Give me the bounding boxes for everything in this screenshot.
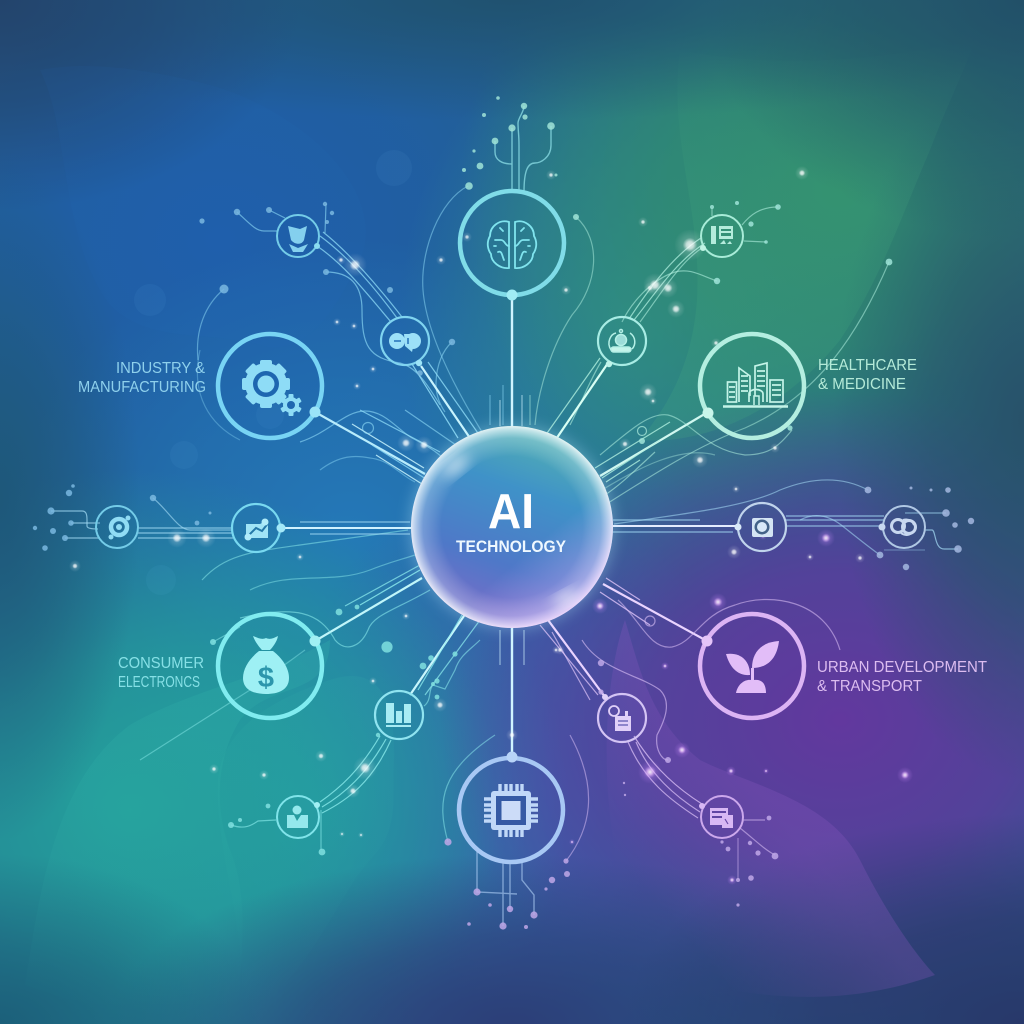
central orb xyxy=(409,424,615,630)
node end dots: grey-blue right xyxy=(865,486,974,570)
node: far-right small xyxy=(878,506,925,548)
node: brain xyxy=(460,191,564,300)
node: lower-right form xyxy=(598,694,646,742)
icon: person pin card xyxy=(287,806,308,828)
node end dots: green side xyxy=(462,96,892,444)
icon: form xyxy=(609,706,631,731)
label: urban xyxy=(817,659,988,695)
node end dots: teal side xyxy=(210,605,458,855)
icon: orbit ring xyxy=(108,516,130,540)
node: top-left small xyxy=(277,215,320,257)
icon: trend card xyxy=(244,518,269,540)
icon: sprout xyxy=(726,641,779,693)
icon: documents xyxy=(710,808,733,828)
node: right small xyxy=(734,503,786,551)
top tree connectors xyxy=(495,106,551,192)
icon: bar chart xyxy=(386,703,411,727)
background wave: inner teal fold xyxy=(218,676,394,1010)
node: money xyxy=(218,614,322,718)
node: far-left small xyxy=(96,506,138,548)
bottom tree connectors xyxy=(477,852,534,926)
label: industry xyxy=(78,360,206,396)
icon: microchip xyxy=(484,784,538,837)
label: industry: MANUFACTURING xyxy=(78,379,206,396)
node: upper-left small xyxy=(381,317,429,366)
node: lower-left outer xyxy=(277,796,320,838)
horizontal connector lines xyxy=(51,480,958,555)
node end dots: blue side xyxy=(33,202,455,551)
icon: cloud brain xyxy=(892,519,916,535)
radial connector lines: lower-left xyxy=(140,530,495,850)
AI heading: AI xyxy=(488,485,534,539)
node end dots: violet side xyxy=(444,660,778,930)
node: chip xyxy=(459,752,563,862)
icon: ring badge xyxy=(752,518,773,537)
node: lower-right outer xyxy=(699,796,743,838)
background wave: top-right green xyxy=(640,40,975,441)
label: healthcare: & MEDICINE xyxy=(818,376,906,393)
background wave: bottom-left teal xyxy=(25,640,330,1011)
icon: brain xyxy=(488,221,536,268)
label: consumer: CONSUMER xyxy=(118,655,204,672)
radial connector lines: upper-right xyxy=(530,207,889,505)
centre spokes top and bottom xyxy=(500,296,524,757)
node: lower-left chart xyxy=(375,691,423,739)
node: city xyxy=(700,334,804,438)
node: gear xyxy=(218,334,322,438)
label: industry: INDUSTRY & xyxy=(116,360,206,377)
background wave: top-left blue xyxy=(40,66,366,347)
icon: money bag: $ xyxy=(258,662,274,694)
icon: talking heads xyxy=(389,333,421,352)
node: plant xyxy=(700,614,804,718)
label: urban: URBAN DEVELOPMENT xyxy=(817,659,988,676)
sparkles xyxy=(69,166,913,885)
background blob dots xyxy=(134,150,412,595)
icon: gears xyxy=(242,360,302,416)
node: upper-right small xyxy=(598,317,646,367)
icon: city skyline xyxy=(723,363,788,406)
label: healthcare xyxy=(818,357,917,393)
node: top-right small xyxy=(700,215,743,257)
radial connector lines: lower-right xyxy=(540,578,840,880)
icon: gauge figure xyxy=(609,330,635,352)
icon: document board xyxy=(711,226,733,244)
background wave: bottom-right purple xyxy=(607,620,935,997)
icon: mask figure xyxy=(288,226,308,252)
node: chart small xyxy=(232,504,286,552)
label: healthcare: HEALTHCARE xyxy=(818,357,917,374)
label: consumer: ELECTRONCS xyxy=(118,674,200,691)
label: urban: & TRANSPORT xyxy=(817,678,922,695)
label: consumer xyxy=(118,655,204,691)
radial connector lines: upper-left xyxy=(197,186,503,484)
technology label: TECHNOLOGY xyxy=(456,538,566,556)
